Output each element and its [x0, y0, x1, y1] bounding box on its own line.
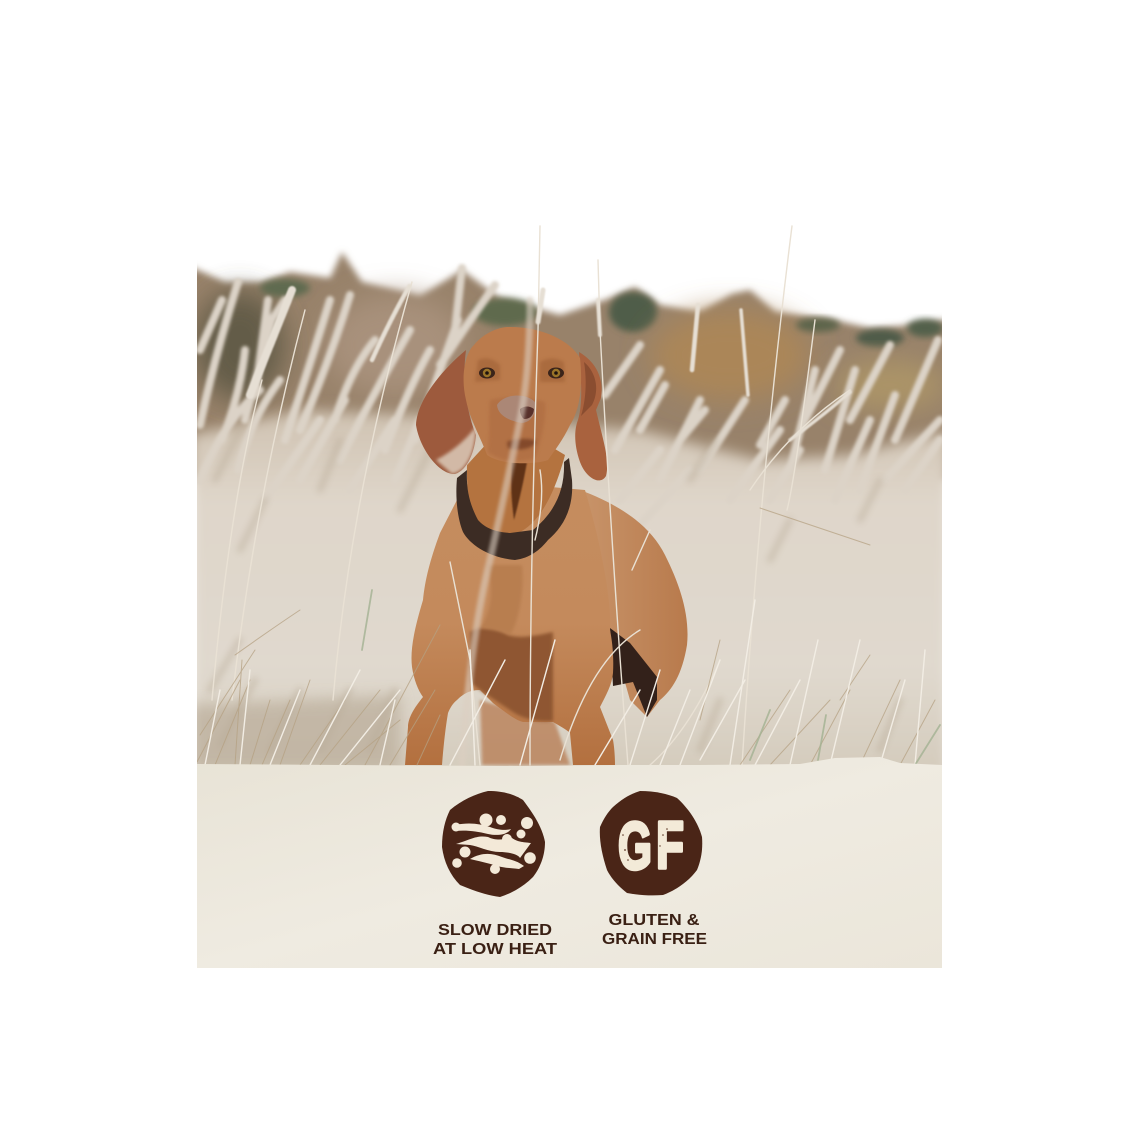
bottom ground shade: [190, 695, 400, 770]
hazy rear legs: [480, 700, 570, 765]
dry tan blades: [197, 508, 935, 765]
left ear: [416, 350, 476, 474]
foreground grass stems: [197, 226, 940, 765]
label: gluten and grain free: GLUTEN &: [608, 912, 700, 929]
photo: dog in tall grass: [180, 226, 960, 780]
dog muzzle shade: [488, 397, 545, 461]
infographic canvas: [197, 225, 942, 968]
feature: slow dried at low heat: [433, 791, 558, 958]
soft darker grass shadows: [210, 430, 900, 750]
dark gap between legs: [610, 628, 657, 717]
label: gluten and grain free: GRAIN FREE: [602, 931, 707, 948]
nose: [497, 396, 535, 423]
label: slow dried at low heat: [433, 922, 558, 958]
brisket shading: [480, 565, 523, 635]
feature: gluten and grain free: [600, 791, 707, 948]
blurred grass plumes: [197, 262, 942, 477]
right eye: [548, 368, 564, 378]
right ear inner fold: [581, 362, 596, 416]
paper background with torn top edge: [197, 757, 942, 968]
dog body and forelegs: [405, 480, 615, 765]
paper panel: [197, 757, 942, 968]
label: gluten and grain free: [602, 912, 707, 948]
right ear: [575, 352, 607, 480]
leather collar: [456, 458, 572, 560]
icon: GF badge: G: [618, 809, 652, 884]
icon: GF badge: [600, 791, 702, 895]
grass field base: [190, 410, 950, 780]
dark chest under the breastbone: [470, 627, 553, 721]
icon: slow dried strips: [442, 791, 545, 897]
distant treeline: [180, 252, 960, 480]
icon: GF badge: F: [656, 808, 684, 883]
label: slow dried at low heat: SLOW DRIED: [438, 922, 552, 939]
neck dark fold: [511, 462, 527, 520]
dog: [405, 327, 688, 765]
dog hindquarters: [580, 490, 688, 717]
mouth: [507, 439, 536, 450]
fine pale stems: [212, 226, 850, 765]
left eye: [479, 368, 495, 378]
left ear pale tip: [436, 426, 476, 474]
thick blurred stem over the dog: [462, 300, 530, 765]
dog neck: [467, 440, 565, 536]
eye brow shading: [475, 358, 565, 382]
white dry blades: [205, 600, 925, 765]
dog head: [464, 327, 581, 463]
green blades: [362, 590, 940, 765]
seed heads: [250, 285, 850, 440]
label: slow dried at low heat: AT LOW HEAT: [433, 941, 558, 958]
